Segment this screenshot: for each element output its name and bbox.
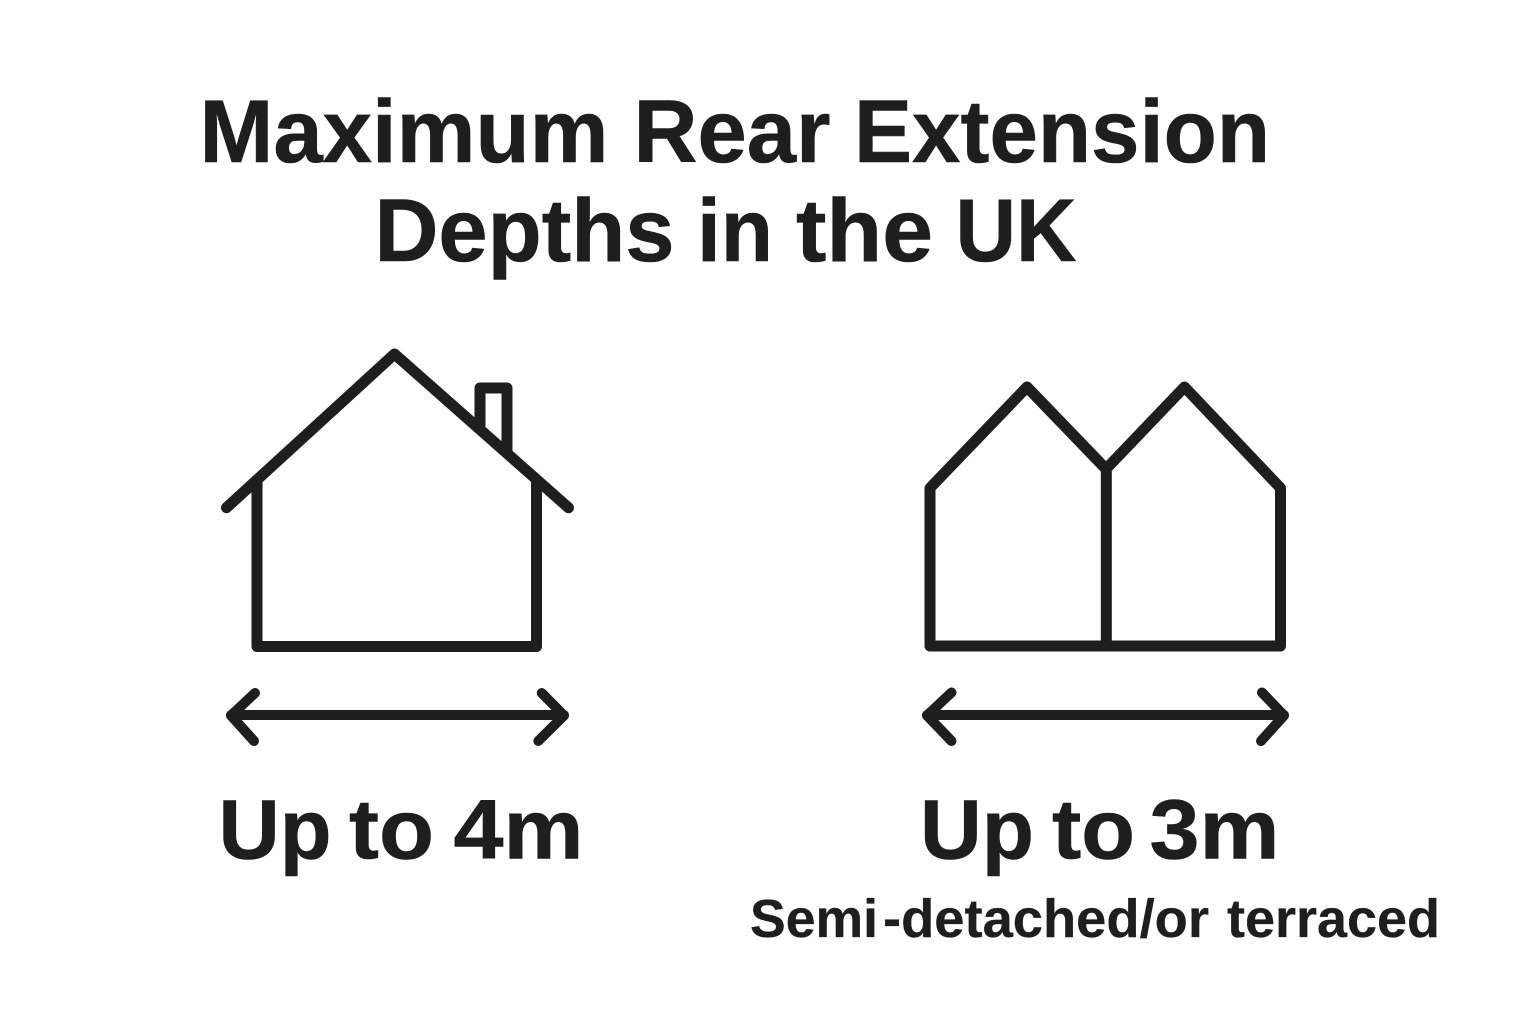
label: up to 3m: 3m (1150, 782, 1280, 876)
label: up to 4m: to (349, 782, 434, 876)
label: semi-detached or terraced: -detached/or (883, 889, 1209, 949)
label: up to 3m: Up (920, 782, 1034, 876)
label: up to 3m: to (1052, 782, 1135, 876)
title: in (697, 180, 773, 280)
label: up to 3m (920, 782, 1280, 876)
label: semi-detached or terraced: terraced (1227, 889, 1440, 949)
title: Depths (374, 180, 674, 280)
title: Maximum (200, 81, 608, 181)
title: Extension (854, 81, 1270, 181)
title: the (796, 180, 933, 280)
arrow: detached depth (231, 693, 564, 741)
title (200, 81, 1270, 280)
icon: detached house (226, 354, 568, 646)
label: up to 4m: 4m (454, 782, 584, 876)
label: semi-detached or terraced (750, 889, 1440, 949)
title: Rear (634, 81, 830, 181)
label: up to 4m: Up (218, 782, 332, 876)
icon: semi-detached houses (930, 387, 1280, 646)
arrow: semi-detached depth (927, 692, 1284, 741)
title: UK (956, 180, 1076, 280)
label: up to 4m (218, 782, 584, 876)
label: semi-detached or terraced: Semi (750, 889, 878, 949)
